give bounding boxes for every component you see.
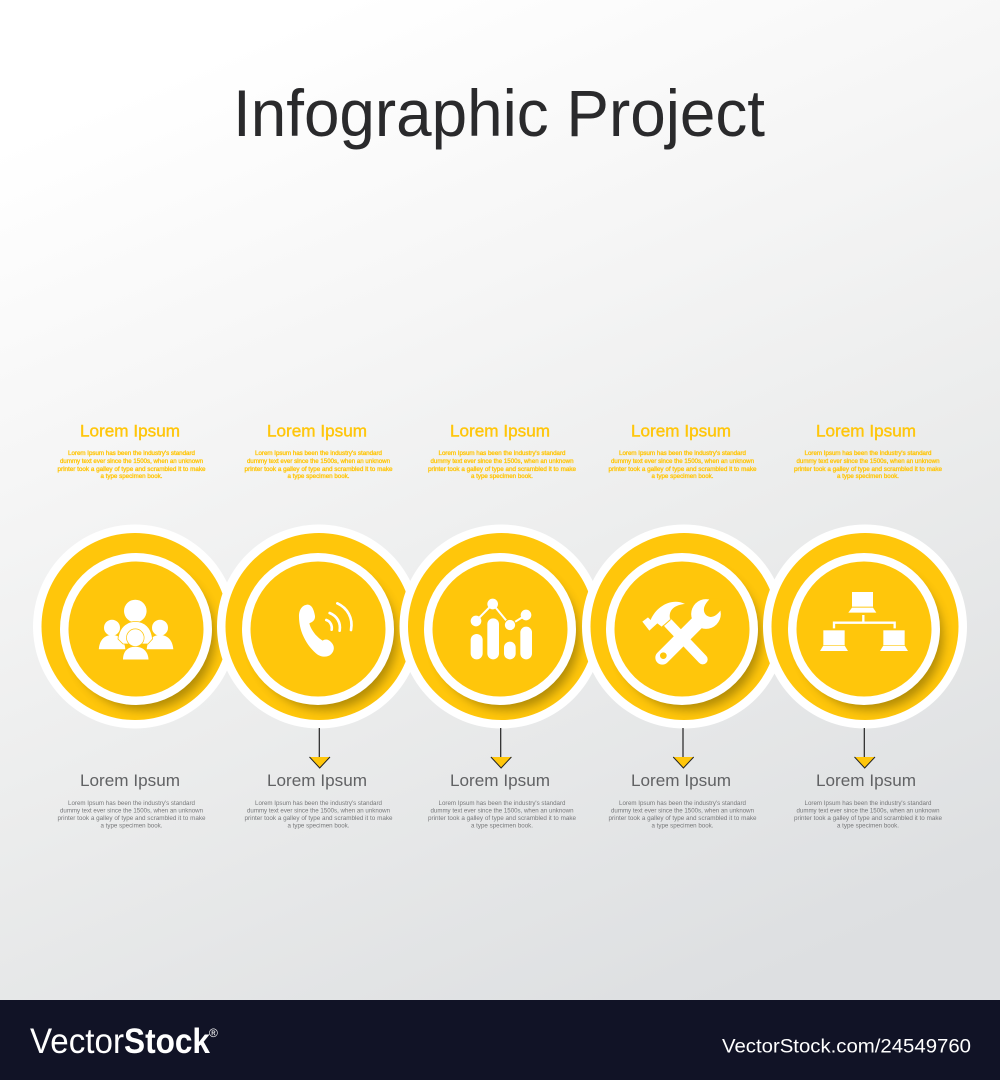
arrow 5: [854, 728, 875, 768]
footer image id: VectorStock.com/24549760: [722, 1036, 971, 1058]
icon: bar and line chart: [471, 599, 532, 659]
bottom text block 1: [58, 771, 206, 830]
top text block 2: Lorem Ipsum: [267, 422, 367, 440]
bottom text block 5: Lorem Ipsum has been the industry's standard: [804, 800, 932, 807]
top text block 2: [244, 422, 393, 480]
footer bar: [0, 1000, 1000, 1080]
circle 4: tools: [582, 524, 786, 728]
top text block 5: a type specimen book.: [837, 473, 899, 480]
bottom text block 4: Lorem Ipsum has been the industry's standard: [619, 800, 746, 807]
top text block 5: dummy text ever since the 1500s, when an unknown: [796, 458, 940, 465]
icon: network of laptops: [820, 592, 908, 651]
bottom text block 5: [794, 771, 942, 830]
arrow 3: [491, 728, 511, 768]
top text block 3: [428, 422, 576, 480]
bottom text block 1: Lorem Ipsum has been the industry's standard: [68, 800, 195, 807]
top text block 5: Lorem Ipsum: [816, 422, 916, 440]
top text block 2: Lorem Ipsum has been the industry's standard: [255, 450, 382, 457]
footer logo: [30, 1022, 218, 1061]
bottom text block 1: dummy text ever since the 1500s, when an unknown: [60, 808, 203, 814]
bottom text block 3: printer took a galley of type and scrambled it to make: [428, 815, 576, 822]
top text block 2: dummy text ever since the 1500s, when an unknown: [247, 458, 390, 465]
top text block 5: Lorem Ipsum has been the industry's standard: [804, 450, 932, 457]
footer logo: Vector: [30, 1022, 124, 1061]
bottom text block 2: [244, 771, 393, 830]
title: Infographic Project: [233, 76, 765, 150]
circle 3: chart: [400, 524, 604, 728]
top text block 5: [794, 422, 942, 480]
top text block 4: Lorem Ipsum has been the industry's standard: [619, 450, 746, 457]
icon: hammer and wrench: [642, 598, 728, 659]
top text block 3: dummy text ever since the 1500s, when an unknown: [430, 458, 574, 465]
top text block 3: a type specimen book.: [471, 473, 533, 480]
circle 1: people: [33, 524, 237, 728]
bottom text block 1: printer took a galley of type and scrambled it to make: [58, 815, 206, 822]
footer logo: Stock: [124, 1022, 210, 1061]
bottom text block 2: Lorem Ipsum has been the industry's standard: [255, 800, 382, 807]
bottom text block 5: a type specimen book.: [837, 822, 899, 830]
bottom text block 5: Lorem Ipsum: [816, 771, 916, 790]
arrow 2: [310, 728, 330, 768]
bottom text block 5: printer took a galley of type and scrambled it to make: [794, 815, 942, 822]
top text block 4: printer took a galley of type and scrambled it to make: [608, 466, 757, 473]
top text block 1: Lorem Ipsum has been the industry's standard: [68, 450, 195, 457]
bottom text block 3: Lorem Ipsum: [450, 771, 550, 790]
top text block 1: [58, 422, 206, 480]
top text block 2: a type specimen book.: [288, 473, 350, 480]
bottom text block 2: dummy text ever since the 1500s, when an unknown: [247, 808, 390, 814]
top text block 1: Lorem Ipsum: [80, 422, 180, 440]
top text block 4: [608, 422, 757, 480]
top text block 1: dummy text ever since the 1500s, when an unknown: [60, 458, 203, 465]
top text block 1: a type specimen book.: [100, 473, 163, 480]
top text block 2: printer took a galley of type and scrambled it to make: [244, 466, 393, 473]
bottom text block 2: Lorem Ipsum: [267, 771, 367, 790]
icon: people group: [99, 600, 173, 660]
circle 2: phone: [217, 524, 421, 728]
top text block 3: printer took a galley of type and scrambled it to make: [428, 466, 576, 473]
top text block 3: Lorem Ipsum: [450, 422, 550, 440]
bottom text block 3: a type specimen book.: [471, 822, 533, 830]
bottom text block 2: a type specimen book.: [288, 822, 350, 830]
icon: phone with signal: [299, 603, 351, 657]
circle 5: network: [763, 524, 967, 728]
bottom text block 5: dummy text ever since the 1500s, when an unknown: [796, 808, 940, 814]
bottom text block 1: a type specimen book.: [100, 822, 163, 830]
bottom text block 2: printer took a galley of type and scrambled it to make: [244, 815, 393, 822]
bottom text block 4: [608, 771, 757, 830]
top text block 1: printer took a galley of type and scrambled it to make: [58, 466, 206, 473]
top text block 4: Lorem Ipsum: [631, 422, 731, 440]
top text block 5: printer took a galley of type and scrambled it to make: [794, 466, 942, 473]
bottom text block 4: dummy text ever since the 1500s, when an unknown: [611, 808, 754, 814]
bottom text block 3: Lorem Ipsum has been the industry's standard: [438, 800, 566, 807]
bottom text block 4: printer took a galley of type and scrambled it to make: [608, 815, 757, 822]
arrow 4: [673, 728, 694, 768]
top text block 3: Lorem Ipsum has been the industry's standard: [438, 450, 566, 457]
bottom text block 3: [428, 771, 576, 830]
bottom text block 1: Lorem Ipsum: [80, 771, 180, 790]
bottom text block 3: dummy text ever since the 1500s, when an unknown: [430, 808, 574, 814]
bottom text block 4: Lorem Ipsum: [631, 771, 731, 790]
footer logo: ®: [209, 1026, 218, 1040]
bottom text block 4: a type specimen book.: [652, 822, 714, 830]
top text block 4: a type specimen book.: [652, 473, 714, 480]
top text block 4: dummy text ever since the 1500s, when an unknown: [611, 458, 754, 465]
